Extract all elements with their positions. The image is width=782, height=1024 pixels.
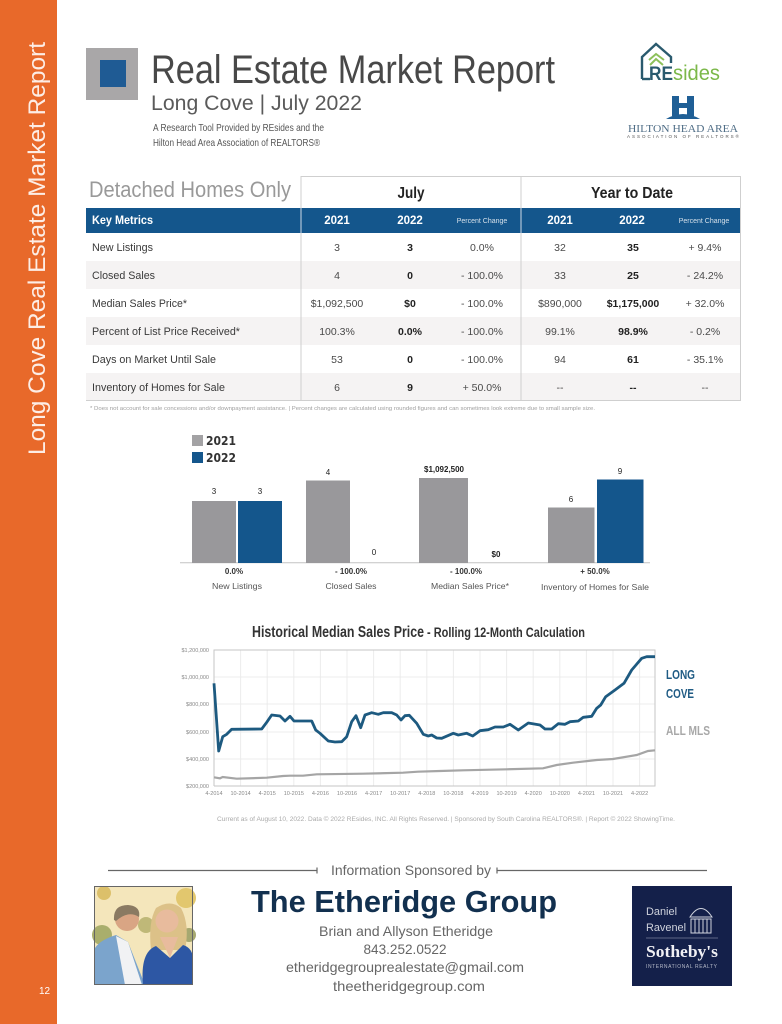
bar group: New Listings — [192, 487, 282, 591]
x axis labels — [205, 791, 648, 797]
bar group: Inventory of Homes: 9 — [618, 467, 623, 476]
row: Inventory of Homes for Sale: -- — [702, 382, 709, 394]
photo: sponsors portrait — [92, 886, 196, 985]
logo: Daniel Ravenel Sotheby's: Daniel — [646, 906, 677, 918]
bar group: Median Sales Price — [419, 465, 510, 591]
x axis labels: 10-2017 — [390, 791, 410, 797]
row: Closed Sales: 0 — [407, 270, 413, 282]
series: Long Cove — [214, 657, 655, 751]
row: New Listings: 32 — [554, 242, 566, 254]
line chart heading: - Rolling 12-Month Calculation — [427, 625, 585, 640]
row: Median Sales Price: Median Sales Price* — [92, 298, 188, 310]
bar group: Median Sales Price: - 100.0% — [450, 567, 482, 576]
bar group: Closed Sales — [306, 468, 377, 591]
y axis labels: $1,200,000 — [181, 648, 209, 654]
table header band: Key Metrics — [92, 215, 153, 227]
bar group: Closed Sales: - 100.0% — [335, 567, 367, 576]
row: Median Sales Price: $890,000 — [538, 298, 582, 310]
x axis labels: 4-2018 — [418, 791, 435, 797]
sponsor heading: Information Sponsored by — [331, 862, 491, 878]
row: New Listings: New Listings — [92, 242, 153, 254]
chart legend: 2021 — [206, 433, 236, 448]
bar chart: July comparison — [180, 433, 650, 592]
logo: Hilton Head Area: ASSOCIATION OF REALTORS® — [627, 133, 740, 139]
row: Days on Market Until Sale: 0 — [407, 354, 413, 366]
row: Median Sales Price — [92, 298, 724, 310]
row: Days on Market Until Sale: 94 — [554, 354, 566, 366]
y axis labels — [181, 648, 209, 790]
series label: All MLS: ALL MLS — [666, 723, 710, 738]
bar group: Median Sales Price: $0 — [492, 550, 501, 559]
x axis labels: 10-2020 — [550, 791, 570, 797]
bar group: Inventory of Homes: + 50.0% — [580, 567, 610, 576]
bar group: Inventory of Homes: 6 — [569, 495, 574, 504]
table header band: Percent Change — [679, 218, 729, 225]
table header band: 2022 — [397, 215, 423, 227]
bar group: Closed Sales: 4 — [326, 468, 331, 477]
bar group: New Listings: 3 — [258, 487, 263, 496]
bar group: New Listings: 0.0% — [225, 567, 243, 576]
provider line one: A Research Tool Provided by REsides and the — [153, 122, 324, 134]
row: Inventory of Homes for Sale — [92, 382, 709, 394]
panel: metrics table — [86, 176, 740, 400]
row: New Listings: 3 — [407, 242, 413, 254]
line chart heading: Historical Median Sales Price — [252, 624, 424, 641]
row: Inventory of Homes for Sale: + 50.0% — [463, 382, 501, 394]
table heading: Detached Homes Only — [89, 177, 291, 202]
row: Inventory of Homes for Sale: -- — [556, 382, 564, 394]
series label: Long Cove: LONG — [666, 667, 695, 682]
x axis labels: 10-2015 — [284, 791, 304, 797]
table header band: Percent Change — [457, 218, 507, 225]
x axis labels: 10-2021 — [603, 791, 623, 797]
bar group: New Listings: New Listings — [212, 581, 262, 591]
logo: Hilton Head Area — [627, 96, 740, 139]
row: Closed Sales: - 24.2% — [687, 270, 723, 282]
row: Days on Market Until Sale: Days on Market Until Sale — [92, 354, 216, 366]
bar group: Inventory of Homes — [541, 467, 649, 592]
row: Inventory of Homes for Sale: 6 — [334, 382, 340, 394]
y axis labels: $200,000 — [186, 784, 209, 790]
bar group: Closed Sales: 0 — [372, 548, 377, 557]
row: Median Sales Price: $1,092,500 — [311, 298, 363, 310]
row: Closed Sales: 25 — [627, 270, 639, 282]
x axis labels: 4-2019 — [471, 791, 489, 797]
y axis labels: $600,000 — [186, 730, 209, 736]
x axis labels: 4-2022 — [631, 791, 648, 797]
sidebar vertical title: Long Cove Real Estate Market Report — [24, 42, 51, 455]
bar group: Median Sales Price: Median Sales Price* — [431, 581, 510, 591]
sponsor contact details: theetheridgegroup.com — [333, 978, 485, 994]
line chart: historical median sales price — [181, 648, 655, 797]
logo: REsides: sides — [673, 62, 720, 85]
data source note: Current as of August 10, 2022. Data © 2022 REsides, INC. All Rights Reserved. | Sponsored by South Carolina REALTORS®. | Report © 2022 ShowingTime. — [217, 815, 675, 823]
chart legend: 2022 — [206, 450, 236, 465]
line chart heading — [252, 624, 585, 641]
bar group: Closed Sales: Closed Sales — [326, 581, 376, 591]
row: Percent of List Price Received: - 100.0% — [461, 326, 503, 338]
icon: header square — [86, 48, 138, 100]
series: all MLS — [214, 750, 655, 779]
row: Percent of List Price Received: Percent of List Price Received* — [92, 326, 241, 338]
row: Closed Sales: Closed Sales — [92, 270, 155, 282]
row: Percent of List Price Received: 98.9% — [618, 326, 649, 338]
sponsor contact details: 843.252.0522 — [364, 941, 447, 957]
row: Percent of List Price Received — [92, 326, 720, 338]
x axis labels: 4-2021 — [578, 791, 595, 797]
logo: Daniel Ravenel Sotheby's: Sotheby's — [646, 942, 718, 961]
x axis labels: 4-2015 — [259, 791, 276, 797]
logo: Hilton Head Area: HILTON HEAD AREA — [628, 124, 738, 135]
row: Median Sales Price: $1,175,000 — [607, 298, 659, 310]
provider line two: Hilton Head Area Association of REALTORS® — [153, 137, 320, 149]
row: New Listings — [92, 242, 721, 254]
row: Inventory of Homes for Sale: Inventory of Homes for Sale — [92, 382, 225, 394]
row: Closed Sales: 33 — [554, 270, 566, 282]
x axis labels: 10-2014 — [231, 791, 251, 797]
row: Closed Sales: - 100.0% — [461, 270, 503, 282]
logo: Daniel Ravenel Sotheby's — [632, 886, 732, 986]
sponsor name: The Etheridge Group — [251, 884, 557, 919]
x axis labels: 4-2014 — [205, 791, 223, 797]
row: Inventory of Homes for Sale: -- — [630, 382, 637, 394]
y axis labels: $800,000 — [186, 702, 209, 708]
row: Median Sales Price: + 32.0% — [686, 298, 724, 310]
logo: Daniel Ravenel Sotheby's: Ravenel — [646, 922, 686, 934]
row: Percent of List Price Received: 100.3% — [319, 326, 355, 338]
series label: Long Cove: COVE — [666, 686, 694, 701]
column group: Year to Date: Year to Date — [591, 185, 673, 202]
x axis labels: 4-2020 — [525, 791, 542, 797]
title block — [151, 48, 555, 149]
row: Days on Market Until Sale — [92, 354, 723, 366]
series label: Long Cove — [666, 667, 695, 701]
y axis labels: $400,000 — [186, 757, 209, 763]
table header band: 2021 — [324, 215, 350, 227]
row: New Listings: 0.0% — [470, 242, 494, 254]
page number: 12 — [39, 986, 51, 997]
row: Percent of List Price Received: 99.1% — [545, 326, 575, 338]
row: New Listings: + 9.4% — [689, 242, 721, 254]
bar group: New Listings: 3 — [212, 487, 217, 496]
row: Closed Sales — [92, 270, 723, 282]
row: Days on Market Until Sale: 61 — [627, 354, 639, 366]
chart legend — [192, 433, 236, 465]
row: Median Sales Price: - 100.0% — [461, 298, 503, 310]
table footnote: * Does not account for sale concessions and/or downpayment assistance. | Percent changes are calculated using rounded figures and can sometimes look extreme due to small sample size. — [90, 406, 595, 412]
row: New Listings: 3 — [334, 242, 340, 254]
logo: REsides — [642, 44, 720, 85]
bar group: Median Sales Price: $1,092,500 — [424, 465, 465, 474]
main title: Real Estate Market Report — [151, 48, 555, 92]
sponsor contact details — [286, 923, 524, 994]
x axis labels: 4-2017 — [365, 791, 382, 797]
x axis labels: 10-2016 — [337, 791, 357, 797]
logo: Daniel Ravenel Sotheby's: INTERNATIONAL REALTY — [646, 964, 718, 970]
row: Days on Market Until Sale: 53 — [331, 354, 343, 366]
sponsor heading — [108, 862, 707, 878]
row: Days on Market Until Sale: - 35.1% — [687, 354, 723, 366]
row: Median Sales Price: $0 — [404, 298, 416, 310]
row: Inventory of Homes for Sale: 9 — [407, 382, 413, 394]
table header band — [86, 208, 740, 233]
row: Closed Sales: 4 — [334, 270, 340, 282]
row: Percent of List Price Received: 0.0% — [398, 326, 423, 338]
row: New Listings: 35 — [627, 242, 639, 254]
y axis labels: $1,000,000 — [181, 675, 209, 681]
logo: REsides: RE — [649, 64, 673, 85]
sponsor contact details: Brian and Allyson Etheridge — [319, 923, 493, 939]
column group: July: July — [398, 185, 425, 202]
subtitle: Long Cove | July 2022 — [151, 92, 362, 115]
row: Days on Market Until Sale: - 100.0% — [461, 354, 503, 366]
table header band: 2021 — [547, 215, 573, 227]
row: Percent of List Price Received: - 0.2% — [690, 326, 720, 338]
bar group: Inventory of Homes: Inventory of Homes for Sale — [541, 582, 649, 592]
x axis labels: 4-2016 — [312, 791, 329, 797]
sponsor contact details: etheridgegrouprealestate@gmail.com — [286, 959, 524, 975]
x axis labels: 10-2018 — [443, 791, 463, 797]
x axis labels: 10-2019 — [497, 791, 517, 797]
table header band: 2022 — [619, 215, 645, 227]
panel: orange sidebar — [0, 0, 57, 1024]
